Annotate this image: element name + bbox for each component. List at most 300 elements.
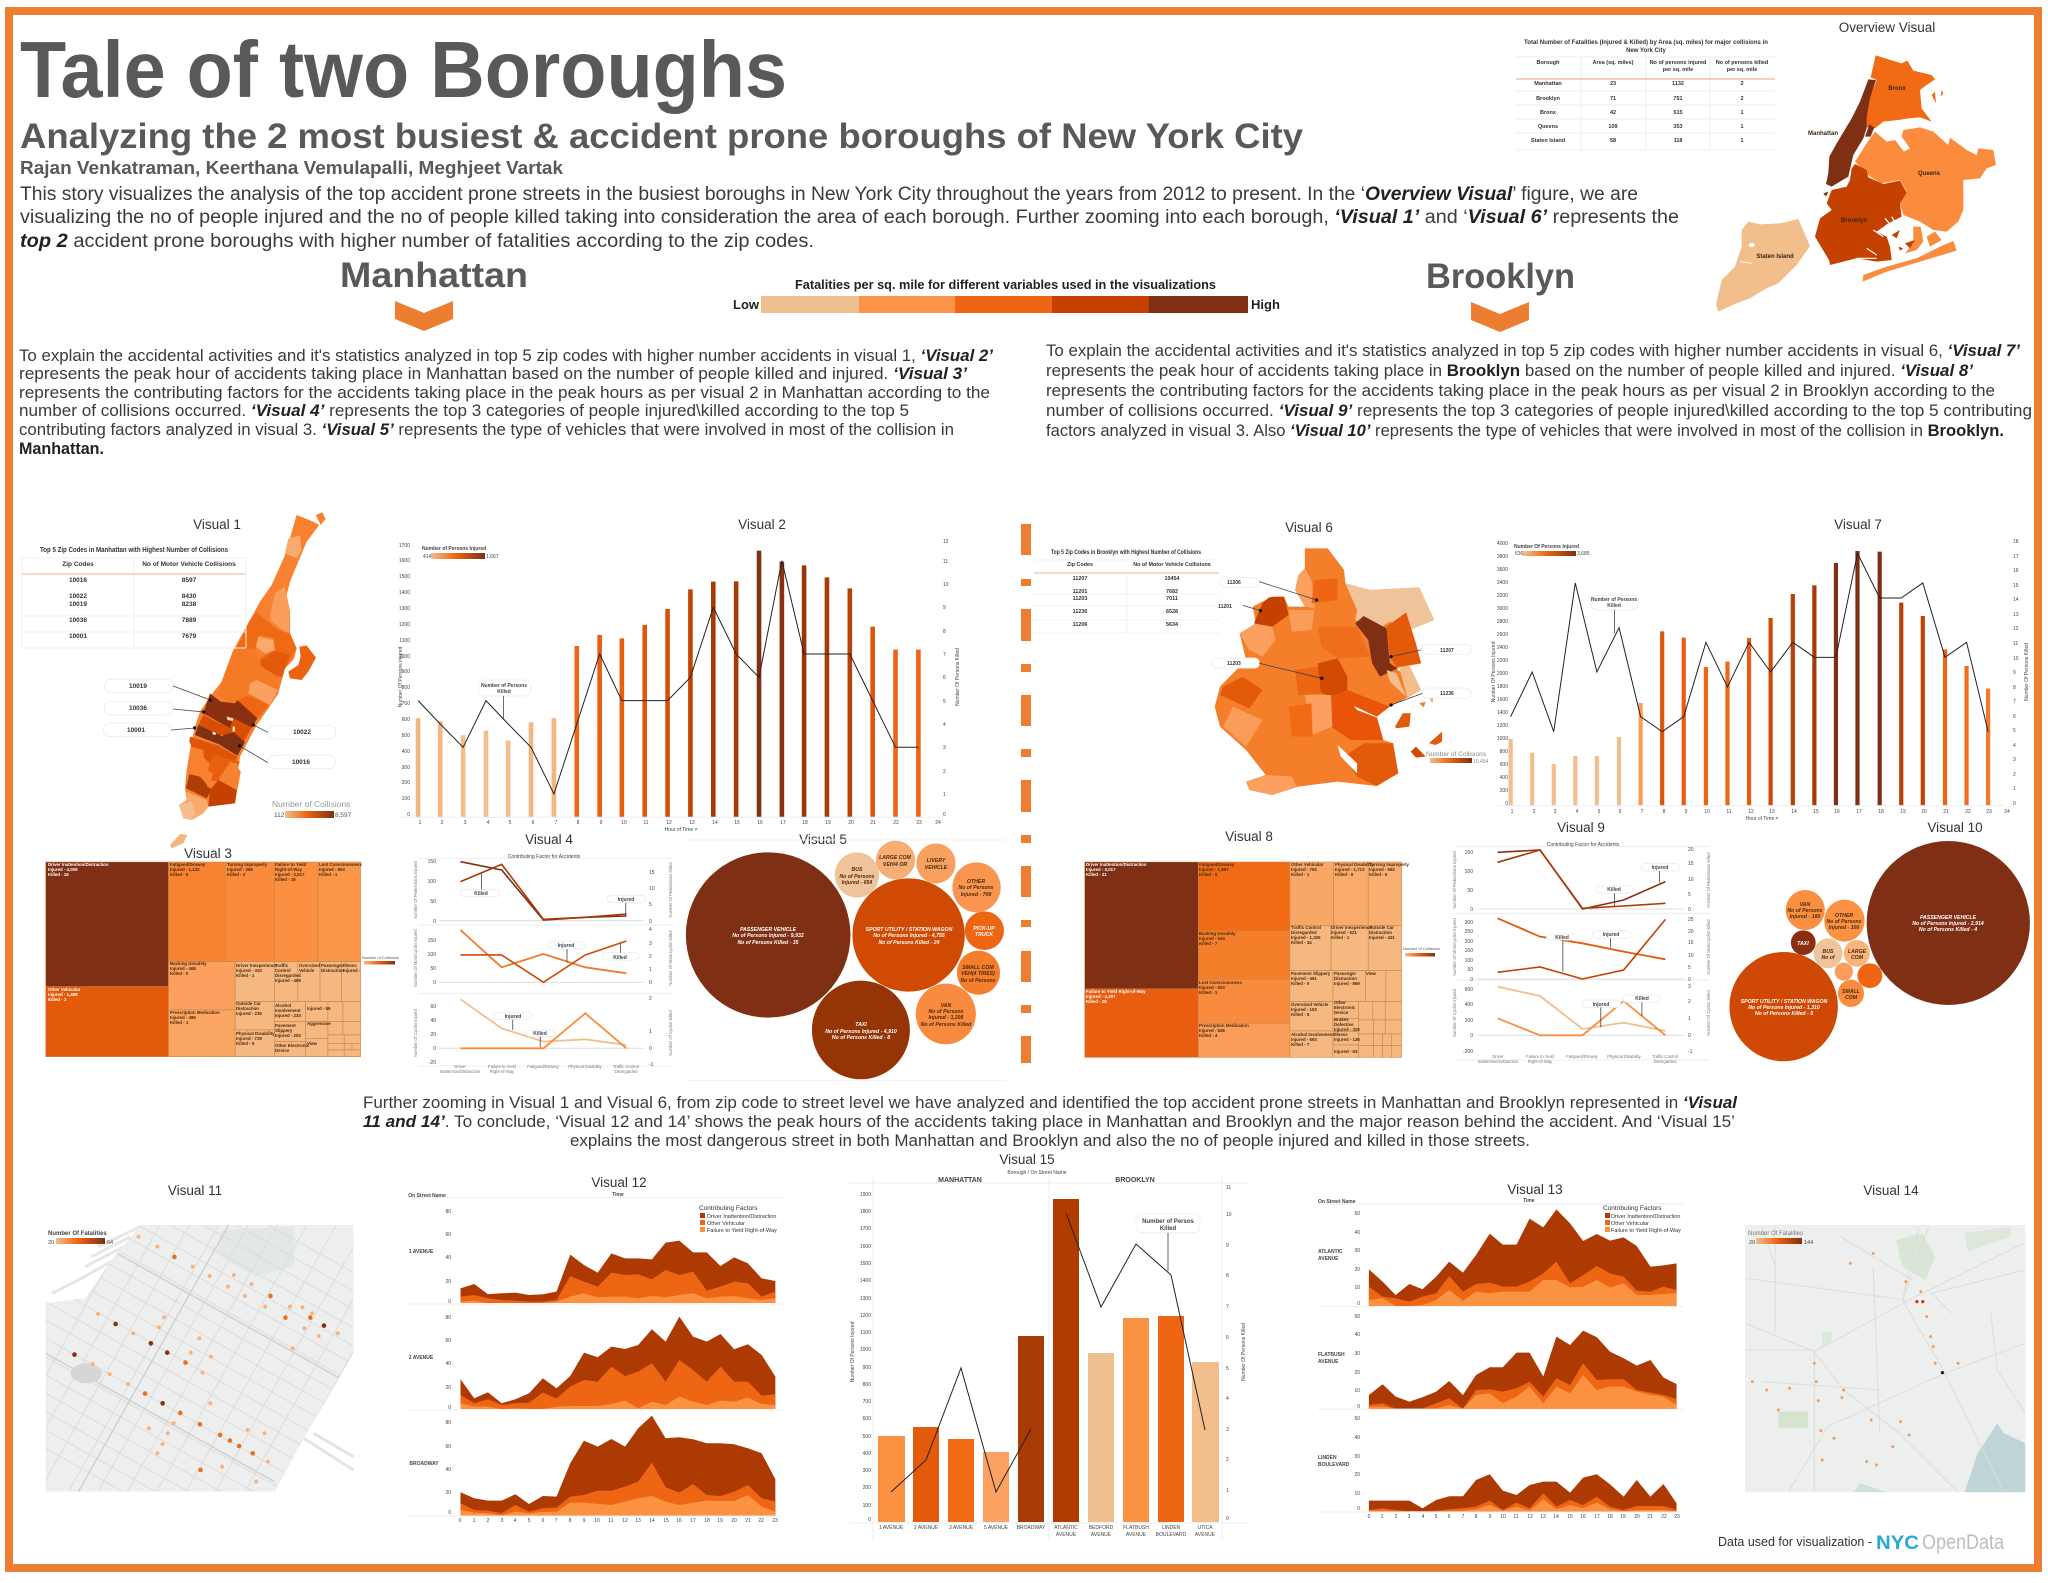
axis labels: Visual 7: 3000 [1497,606,1508,612]
panel: Visual 13 [1318,1182,1684,1520]
treemap labels: Disregarded [275,973,301,978]
treemap labels: Aggressive [307,1021,331,1026]
axis labels: Visual 2: Number Of Persons Injured [398,646,404,707]
panel: Visual 11 [45,1185,354,1492]
bubble labels: SPORT UTILITY / STATION WAGON [1741,999,1828,1005]
labels: Visual 15: 9 [1226,1243,1229,1249]
labels: Visual 9: Number Of Cyclist Injured [1452,988,1457,1037]
labels: Visual 4: 1 [649,1029,652,1035]
bubble labels: PICK-UP [973,926,995,932]
axis labels: Visual 7: 1200 [1497,723,1508,729]
bubble labels: No of Persons Killed - 5 [1755,1011,1813,1017]
labels: Visual 4: 0 [649,1046,652,1052]
labels: Visual 13: 5 [1435,1514,1438,1520]
labels: Visual 12: 4 [514,1518,517,1524]
panel: overview table: 1 [1740,138,1744,144]
labels: Visual 4: 60 [430,1004,436,1010]
bubble labels: Injured - 100 [1829,925,1859,931]
labels: Visual 12: 23 [772,1518,778,1524]
labels: Visual 4: Contributing Factor for Accidents [508,854,581,860]
panel: Visual 1 [22,512,352,848]
legend: contributing factors [699,1205,777,1234]
treemap labels: Traffic [275,963,289,968]
table: top zip codes Manhattan: 10036 [69,617,87,624]
axis labels: Visual 2: 3 [943,745,946,751]
panel: overview table: 515 [1673,110,1683,116]
text block: Manhattan explanation: number of collisions occurred. ‘Visual 4’ represents the top 3 categories of people injured\killed according to the top 5 [19,402,909,420]
labels: Visual 12: 17 [690,1518,696,1524]
bubble labels: Injured - 160 [1790,914,1820,920]
bubble labels: COM [1845,995,1858,1001]
intro paragraph: top 2 accident prone boroughs with higher number of fatalities according to the zip codes. [20,231,814,252]
treemap labels: Failure to Yield Right-of-Way [1086,989,1146,994]
panel: overview table: 58 [1610,138,1616,144]
axis labels: Visual 7: Number Of Persons Injured [1491,641,1497,702]
table: top zip codes Manhattan: Zip Codes [62,561,94,568]
axis labels: Visual 2: 12 [666,820,672,826]
treemap labels: Injured - 644 [1199,936,1225,941]
labels: Visual 15: 4 [1226,1396,1229,1402]
labels: Visual 12: 20 [445,1279,451,1285]
text block: Brooklyn explanation: represents the peak hour of accidents taking place in Brooklyn based on the number of people killed and injured. ‘Visual 8’ [1046,362,1973,380]
labels: Visual 9: 0 [1470,977,1473,983]
labels: Visual 12: 3 [501,1518,504,1524]
labels: Visual 15: 100 [863,1503,871,1509]
legend: contributing factors: Contributing Factors [1603,1205,1662,1212]
treemap labels: Injured - 653 [1199,985,1225,990]
callouts: Brooklyn zip labels: 11203 [1227,661,1241,667]
axis labels: Visual 2: 13 [689,820,695,826]
labels: Visual 15: ATLANTIC [1054,1525,1078,1531]
treemap labels: Fatigued/Drowsy [1199,862,1235,867]
labels: Visual 12: 1 [473,1518,476,1524]
labels: Visual 13: FLATBUSH [1318,1352,1345,1358]
labels: Visual 12: 60 [445,1338,451,1344]
treemap labels: Device [1334,1010,1349,1015]
labels: Visual 15: 3 AVENUE [949,1525,974,1531]
treemap labels [48,862,362,1053]
axis labels: Visual 7: 4 [1576,809,1579,815]
axis labels: Visual 2: 8 [943,629,946,635]
treemap labels: Other Vehicular [48,987,81,992]
labels: Visual 9: 15 [1688,861,1694,867]
labels: Visual 9: Number Of Pedestrians Killed [1706,852,1711,908]
treemap labels: Right-of-Way [275,867,303,872]
heading: Visual 6: Visual 6 [1285,520,1333,535]
labels: Visual 15: 2 AVENUE [914,1525,939,1531]
labels: Visual 4: Injured [505,1014,521,1020]
axis labels: Visual 2: Number of Persons Injured [422,546,486,552]
axis labels: Visual 7: 3800 [1497,554,1508,560]
axis labels: Visual 7: 19 [1900,809,1906,815]
labels: Visual 13: 20 [1354,1267,1360,1273]
treemap labels: Injured - 59 [307,1006,331,1011]
labels: Visual 9: 0 [1688,1033,1691,1039]
labels: Visual 9: 20 [1688,929,1694,935]
labels: Visual 12: 40 [445,1467,451,1473]
panel: overview table: 118 [1674,138,1682,144]
labels: Visual 4: 5 [649,902,652,908]
labels: Visual 12: Time [612,1192,624,1198]
axis labels: Visual 7: 6 [1619,809,1622,815]
axis labels: Visual 2: 414 [423,554,432,560]
treemap labels: Backing Unsafely [1199,931,1236,936]
axis labels: Visual 2: 22 [893,820,899,826]
axis labels: Visual 2: 200 [402,780,410,786]
labels: Visual 9: Number Of Pedestrians Injured [1452,850,1457,909]
panel: overview table: New York City [1626,48,1667,54]
treemap: Manhattan contributing factors [46,862,361,1057]
axis labels: Visual 7: 5 [1598,809,1601,815]
text block: Brooklyn explanation: To explain the accidental activities and it's statistics analyzed in top 5 zip codes with higher number accidents in visual 6, ‘Visual 7’ [1046,342,2020,360]
labels: Visual 12: 18 [704,1518,710,1524]
table: top zip codes Manhattan: Top 5 Zip Codes in Manhattan with Highest Number of Collisions [40,547,228,554]
axis labels: Visual 2: 12 [943,539,949,545]
treemap labels: Alcohol [275,1003,291,1008]
treemap labels: Injured - 953 [319,867,345,872]
panel: overview table: 1 [1740,124,1744,130]
panel: overview table: 109 [1608,124,1618,130]
labels: Visual 13: 6 [1448,1514,1451,1520]
labels: Visual 12: 12 [622,1518,628,1524]
treemap labels: Injured - 1,132 [170,867,200,872]
treemap labels: Injured - 3,017 [1086,867,1116,872]
bubble labels: VAN [941,1003,952,1009]
axis labels: Visual 2: 18 [802,820,808,826]
treemap labels: Driver Inexperience [236,963,277,968]
labels: Visual 9: 1 [1688,1016,1691,1022]
axis labels: Visual 2: 1400 [399,590,410,596]
labels: Visual 15: AVENUE [1056,1532,1077,1538]
axis labels: Visual 7: 200 [1500,788,1508,794]
axis labels: Visual 2: 24 [935,820,941,826]
labels: Visual 15: Number of Persos [1142,1219,1194,1225]
labels: Visual 15: 7 [1226,1304,1229,1310]
labels: Visual 13: 3 [1408,1514,1411,1520]
labels: Visual 9: Traffic Control [1652,1054,1678,1059]
chart: Manhattan area panels [408,1197,782,1516]
treemap labels: Other Electronic [275,1043,310,1048]
footer: data source [1718,1531,2004,1554]
arrow: Manhattan chevron [395,301,453,331]
labels: Visual 13: 2 [1395,1514,1398,1520]
labels: Visual 9: 10 [1688,877,1694,883]
axis labels: Visual 7: 23 [1986,809,1992,815]
labels: Visual 12: 21 [745,1518,751,1524]
labels: Visual 4: 4 [649,927,652,933]
treemap labels: Control [275,968,291,973]
labels: Visual 13 [1318,1198,1680,1520]
axis labels: Visual 7: 9 [2013,670,2016,676]
labels: Visual 13: 8 [1475,1514,1478,1520]
legend: number of collisions: 8,597 [335,812,352,819]
legend: fatalities Brooklyn: 20 [1749,1240,1755,1246]
footer: data source: OpenData [1922,1531,2004,1554]
legend: number of collisions: Number of Collisions [272,799,350,809]
bubble labels: TAXI [855,1022,867,1028]
heading: Visual 9: Visual 9 [1557,820,1605,835]
labels: Visual 4: 2 [649,954,652,960]
bubble labels: No of Persons Injured - 4,755 [873,933,945,939]
labels: Visual 9: 10 [1688,953,1694,959]
labels: Visual 9: 200 [1465,1018,1473,1024]
labels: Visual 15: 1900 [860,1192,871,1198]
labels: Visual 15: Killed [1160,1226,1176,1232]
treemap labels: Killed - 1 [1199,990,1218,995]
axis labels: Visual 7: 8 [2013,685,2016,691]
labels: Visual 4: 0 [649,919,652,925]
labels: Visual 9: Right-of-Way [1528,1059,1553,1064]
panel: Visual 12 [408,1175,782,1524]
text block: conclusion: Further zooming in Visual 1 and Visual 6, from zip code to street level we have analyzed and identified the top accident prone streets in Manhattan and Brooklyn represented in ‘Visual [363,1093,1738,1112]
text block: Brooklyn explanation: represents the contributing factors for the accidents taking place in the peak hours as per visual 2 in Brooklyn according to the [1046,382,1995,400]
bubble labels: No of Persons [1826,919,1862,925]
panel: overview table: Brooklyn [1536,96,1561,102]
axis labels: Visual 7: 3 [1554,809,1557,815]
labels: Visual 4: Physical Disability [568,1064,603,1069]
axis labels: Visual 7: 1800 [1497,684,1508,690]
axis labels: Visual 2: 20 [848,820,854,826]
bubble labels: PASSENGER VEHICLE [1920,915,1977,921]
treemap labels: Killed - 0 [1291,981,1310,986]
legend: fatalities Brooklyn: 144 [1804,1240,1813,1246]
bubble labels: BUS [852,867,863,873]
authors: Rajan Venkatraman, Keerthana Vemulapalli, Meghjeet Vartak [20,158,564,178]
labels: Visual 13: 0 [1357,1404,1360,1410]
axis labels: Visual 7: 4 [2013,743,2016,749]
labels: Visual 9: Failure to Yield [1526,1054,1555,1059]
labels: Visual 13: Time [1523,1198,1535,1204]
axis labels: Visual 2 [398,539,961,833]
axis labels: Visual 7: 16 [1834,809,1840,815]
labels: Visual 9: 3 [1688,984,1691,990]
axis labels: Visual 7: 11 [1726,809,1732,815]
labels: Visual 4: Failure to Yield [488,1064,517,1069]
axis labels: Visual 7: 14 [1791,809,1797,815]
labels: Visual 15: 300 [863,1468,871,1474]
axis labels: Visual 7: 800 [1500,749,1508,755]
labels: Visual 9: -1 [1688,1049,1693,1055]
axis labels: Visual 7: 10 [2013,656,2019,662]
labels: Visual 12: 22 [758,1518,764,1524]
table: top zip codes Manhattan [22,547,246,648]
panel: overview table: per sq. mile [1727,67,1757,73]
labels: Visual 9: 300 [1465,920,1473,926]
callouts: zip code labels: 10036 [129,705,147,712]
treemap labels: Driver Inexperience [1331,925,1372,930]
legend: fatalities per sq. mile: High [1251,297,1280,312]
treemap labels: Killed - 2 [227,872,246,877]
axis labels: Visual 7: 9 [1685,809,1688,815]
bubble labels: VEHICLE [925,865,948,871]
axis labels: Visual 2: 11 [943,559,948,565]
treemap labels: Killed - 1 [1291,872,1310,877]
table: top zip codes Brooklyn: 5634 [1166,622,1178,628]
text block: Manhattan explanation: contributing factors analyzed in visual 3. ‘Visual 5’ represents the type of vehicles that were involved in most of the collision in [19,421,954,439]
labels: Visual 9: Killed [1555,935,1569,941]
labels: Visual 12: 0 [448,1405,451,1411]
axis labels: Visual 7: 2 [1533,809,1536,815]
treemap labels: Pavement [275,1023,296,1028]
labels: Visual 4: Number Of Pedestrians Killed [668,862,673,918]
panel: Visual 7 [1491,517,2030,822]
panel: overview table: 1132 [1672,81,1684,87]
labels: Visual 12: 60 [445,1232,451,1238]
heading: Manhattan: Manhattan [340,256,528,295]
axis labels: Visual 7: 0 [1505,801,1508,807]
treemap labels: Injured - 593 [1291,1037,1317,1042]
treemap labels: Brakes [1334,1017,1349,1022]
labels: Visual 13: 30 [1354,1454,1360,1460]
axis labels: Visual 7: 14 [2013,597,2019,603]
legend: number of collisions: 112 [274,812,285,819]
legend: Brooklyn collisions: Number of Collisions [1426,751,1487,758]
labels: Visual 4: Fatigued/Drowsy [527,1064,560,1069]
map: New York City boroughs: Bronx [1888,86,1906,92]
treemap labels: Failure to Yield [275,862,307,867]
bubble labels: VAN [1800,902,1811,908]
axis labels: Visual 2: 19 [825,820,831,826]
bubble labels [1741,902,1984,1017]
chart: Brooklyn hourly bars [1494,551,2004,806]
treemap labels: Lost Consciousness [319,862,362,867]
chart: hourly injured bars [398,551,941,817]
axis labels: Visual 7: 3,685 [1577,551,1590,557]
labels: Visual 4: Inattention/Distraction [440,1069,481,1074]
labels: Visual 12: 40 [445,1361,451,1367]
labels: Visual 4: -20 [429,1060,436,1066]
labels: Visual 13: ATLANTIC [1318,1249,1343,1255]
panel: overview table: per sq. mile [1663,67,1693,73]
legend: contributing factors [1603,1205,1681,1234]
panel: Visual 9 [1452,820,1711,1064]
legend: contributing factors: Other Vehicular [707,1221,745,1227]
bubble labels: OTHER [967,879,985,885]
labels: Visual 12: BROADWAY [409,1461,439,1467]
labels: Visual 15: 1 AVENUE [879,1525,904,1531]
axis labels: Visual 7: 3200 [1497,593,1508,599]
axis labels: Visual 2: 1100 [399,638,410,644]
axis labels: Visual 7: 21 [1943,809,1949,815]
text block: conclusion: explains the most dangerous street in both Manhattan and Brooklyn and also the no of people injured and killed in those streets. [570,1131,1530,1150]
labels: Visual 13: 30 [1354,1351,1360,1357]
legend: fatalities Brooklyn: Number Of Fatalities [1748,1231,1803,1237]
treemap labels: Pavement Slippery [1291,971,1331,976]
labels: Visual 13: 20 [1634,1514,1640,1520]
bubble labels: No of Persons Killed - 4 [1919,927,1977,933]
labels: Visual 12: 2 [487,1518,490,1524]
heading: Visual 11: Visual 11 [168,1183,222,1198]
labels: Visual 9: Killed [1635,996,1649,1002]
axis labels: Visual 7: 1400 [1497,710,1508,716]
labels: Visual 13: BOULEVARD [1318,1462,1350,1468]
axis labels: Visual 2: 5 [509,820,512,826]
map: Manhattan streets [45,1225,354,1492]
axis labels: Visual 2: 1 [419,820,422,826]
treemap labels: Oversized Vehicle [1291,1002,1329,1007]
bubble labels: PASSENGER VEHICLE [740,927,797,933]
labels: Visual 12: 6 [542,1518,545,1524]
axis labels: Visual 2: 4 [487,820,490,826]
labels: Visual 15: BROADWAY [1017,1525,1046,1531]
labels: Visual 15: UTICA [1198,1525,1213,1531]
axis labels: Visual 2: 7 [943,652,946,658]
labels: Visual 9: Injured [1652,865,1668,871]
labels: Visual 4: Traffic Control [613,1064,639,1069]
bubble labels: TAXI [1797,941,1809,947]
treemap labels: Backing Unsafely [170,961,207,966]
bubble labels: Injured - 709 [961,892,991,898]
labels: Visual 4: 150 [428,938,436,944]
labels: Visual 15: 500 [863,1434,871,1440]
labels: Visual 13: 1 [1381,1514,1384,1520]
labels: Visual 15: BOULEVARD [1156,1532,1187,1538]
panel: Visual 5 [686,832,1006,1081]
bubble labels: No of Persons [1787,908,1823,914]
labels: Visual 4: 10 [649,886,655,892]
labels: Visual 4: Killed [613,955,627,961]
axis labels: Visual 2: Hour of Time ≠ [665,827,698,833]
bubble labels: No of Persons Killed [921,1022,972,1028]
treemap labels: Outside Car [1369,925,1394,930]
treemap labels: Turning Improperly [227,862,267,867]
labels: Visual 4: 15 [649,870,655,876]
labels: Visual 12: 0 [448,1299,451,1305]
labels: Visual 9: 5 [1688,892,1691,898]
treemap labels: Traffic Control [1291,925,1321,930]
axis labels: Visual 2: 0 [943,812,946,818]
axis labels: Visual 2: 17 [780,820,786,826]
axis labels: Visual 7: 2200 [1497,658,1508,664]
bubble labels: No of Persons [928,1009,964,1015]
axis labels: Visual 7: 8 [1663,809,1666,815]
panel: Visual 3 [46,846,399,1057]
labels: Visual 4: Number Of Pedestrians Injured [413,860,418,919]
table: top zip codes Brooklyn: 11236 [1073,609,1087,615]
axis labels: Visual 7: 11 [2013,641,2018,647]
legend: treemap Brooklyn [1403,946,1440,956]
axis labels: Visual 7: 12 [1748,809,1754,815]
treemap labels: Killed - 7 [1199,941,1218,946]
labels: Visual 4: 3 [649,941,652,947]
treemap labels: Killed - 16 [48,872,69,877]
axis labels: Visual 2: 1700 [399,543,410,549]
table: top zip codes Manhattan: 8238 [182,601,197,608]
labels: Visual 13: 21 [1647,1514,1653,1520]
labels: Visual 15: AVENUE [1195,1532,1216,1538]
treemap labels: Illness [343,963,357,968]
treemap labels: Vehicle [299,968,315,973]
callouts: Brooklyn zip labels: 11207 [1440,648,1454,654]
heading: Visual 13: Visual 13 [1507,1182,1563,1197]
table: top zip codes Brooklyn: Zip Codes [1067,562,1093,568]
treemap labels: Killed - 1 [319,872,338,877]
labels: Visual 9: Physical Disability [1607,1054,1642,1059]
legend: contributing factors: Other Vehicular [1611,1221,1649,1227]
axis labels: Visual 7: 18 [2013,539,2019,545]
labels: Visual 4: 100 [428,952,436,958]
heading: Visual 2: Visual 2 [738,517,786,532]
labels: Visual 9: 5 [1688,965,1691,971]
labels: Visual 15: 200 [863,1485,871,1491]
axis labels: Visual 7: 22 [1965,809,1971,815]
panel: Visual 2 [398,517,961,833]
table: top zip codes Manhattan: 10019 [69,601,87,608]
legend: contributing factors: Failure to Yield Right-of-Way [707,1228,777,1234]
legend: fatalities: 64 [107,1240,113,1246]
map: New York City boroughs: Manhattan [1808,131,1838,137]
axis labels: Visual 2: 0 [407,812,410,818]
